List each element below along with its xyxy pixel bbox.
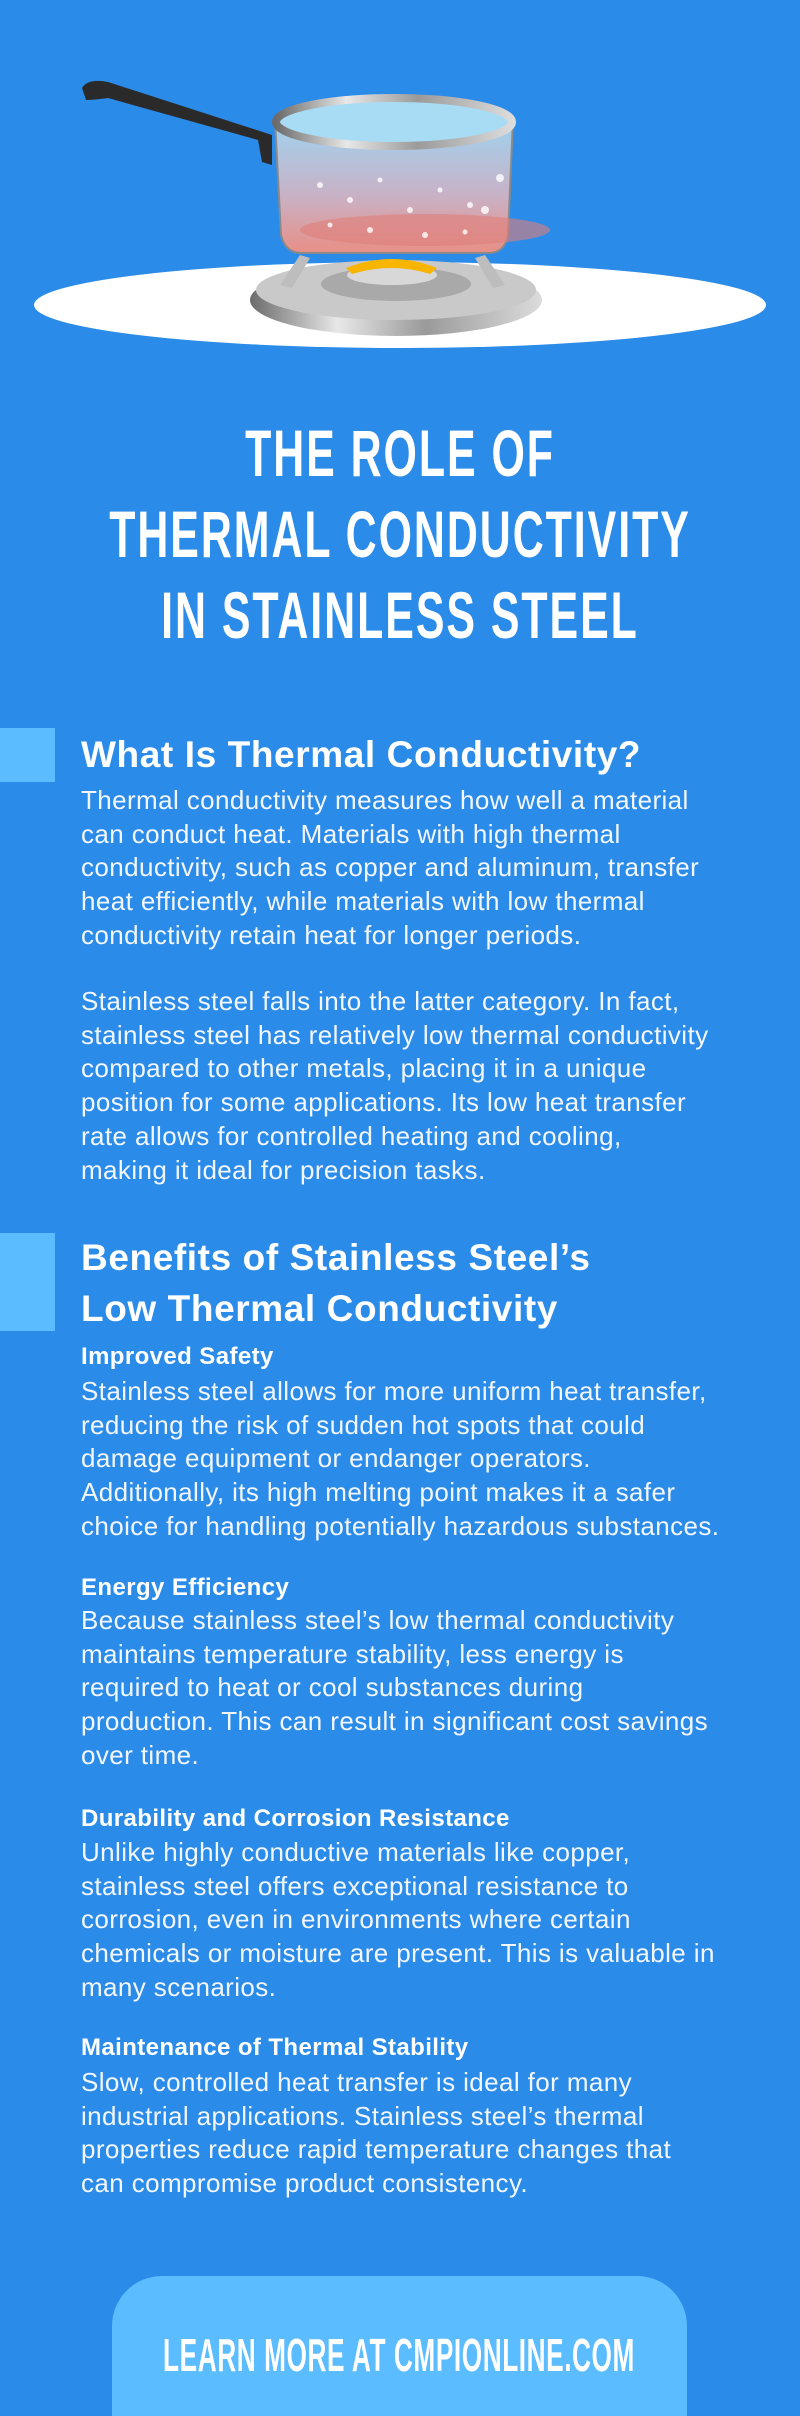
text: improved safety: choice for handling potentially hazardous substances.: [81, 1511, 719, 1541]
text: thermal stability: industrial applications. Stainless steel’s thermal: [81, 2101, 644, 2131]
heading: benefits: Low Thermal Conductivity: [81, 1288, 558, 1329]
title: IN STAINLESS STEEL: [161, 578, 639, 652]
pot body: [275, 120, 513, 253]
illustration: pot on burner: [34, 80, 766, 348]
subheading: thermal stability: Maintenance of Thermal Stability: [81, 2034, 469, 2061]
text: paragraph 2: Stainless steel falls into the latter category. In fact,: [81, 986, 680, 1016]
text: thermal stability: properties reduce rapid temperature changes that: [81, 2134, 671, 2164]
button: learn more: [112, 2276, 687, 2416]
text: paragraph 1: heat efficiently, while materials with low thermal: [81, 886, 645, 916]
text: thermal stability: Slow, controlled heat transfer is ideal for many: [81, 2067, 632, 2097]
white plate: [34, 262, 766, 348]
marker: section 1: [0, 728, 55, 782]
text: durability: chemicals or moisture are present. This is valuable in: [81, 1938, 715, 1968]
text: durability: [81, 1837, 715, 2002]
heading: benefits: [81, 1237, 591, 1329]
text: energy efficiency: [81, 1605, 708, 1770]
text: energy efficiency: Because stainless steel’s low thermal conductivity: [81, 1605, 674, 1635]
text: durability: corrosion, even in environments where certain: [81, 1904, 631, 1934]
text: durability: many scenarios.: [81, 1972, 276, 2002]
text: paragraph 2: compared to other metals, placing it in a unique: [81, 1053, 647, 1083]
text: paragraph 1: [81, 785, 699, 950]
text: durability: stainless steel offers exceptional resistance to: [81, 1871, 629, 1901]
text: paragraph 2: rate allows for controlled heating and cooling,: [81, 1121, 622, 1151]
text: improved safety: Additionally, its high melting point makes it a safer: [81, 1477, 675, 1507]
text: durability: Unlike highly conductive materials like copper,: [81, 1837, 630, 1867]
subheading: durability: Durability and Corrosion Resistance: [81, 1805, 510, 1832]
text: paragraph 1: can conduct heat. Materials with high thermal: [81, 819, 621, 849]
text: paragraph 2: position for some applications. Its low heat transfer: [81, 1087, 686, 1117]
text: improved safety: damage equipment or endanger operators.: [81, 1443, 591, 1473]
subheading: energy efficiency: Energy Efficiency: [81, 1574, 289, 1601]
heading: benefits: Benefits of Stainless Steel’s: [81, 1237, 591, 1278]
text: paragraph 2: stainless steel has relatively low thermal conductivity: [81, 1020, 708, 1050]
text: improved safety: Stainless steel allows for more uniform heat transfer,: [81, 1376, 707, 1406]
text: paragraph 1: Thermal conductivity measures how well a material: [81, 785, 689, 815]
text: energy efficiency: required to heat or cool substances during: [81, 1672, 583, 1702]
text: thermal stability: [81, 2067, 671, 2198]
text: energy efficiency: over time.: [81, 1740, 199, 1770]
heading: what is thermal conductivity: What Is Thermal Conductivity?: [81, 734, 641, 775]
text: paragraph 1: conductivity retain heat for longer periods.: [81, 920, 581, 950]
title: THE ROLE OF: [245, 416, 555, 490]
text: thermal stability: can compromise product consistency.: [81, 2168, 528, 2198]
text: paragraph 2: making it ideal for precision tasks.: [81, 1155, 486, 1185]
button: learn more: LEARN MORE AT CMPIONLINE.COM: [163, 2329, 635, 2381]
title: THERMAL CONDUCTIVITY: [109, 497, 691, 571]
burner: [250, 255, 542, 336]
text: improved safety: [81, 1376, 719, 1541]
marker: section 2: [0, 1233, 55, 1331]
text: paragraph 1: conductivity, such as copper and aluminum, transfer: [81, 852, 699, 882]
title: [109, 416, 691, 652]
text: paragraph 2: [81, 986, 708, 1185]
text: energy efficiency: production. This can result in significant cost savings: [81, 1706, 708, 1736]
handle: [82, 81, 272, 165]
text: improved safety: reducing the risk of sudden hot spots that could: [81, 1410, 645, 1440]
text: energy efficiency: maintains temperature stability, less energy is: [81, 1639, 624, 1669]
subheading: improved safety: Improved Safety: [81, 1343, 274, 1370]
